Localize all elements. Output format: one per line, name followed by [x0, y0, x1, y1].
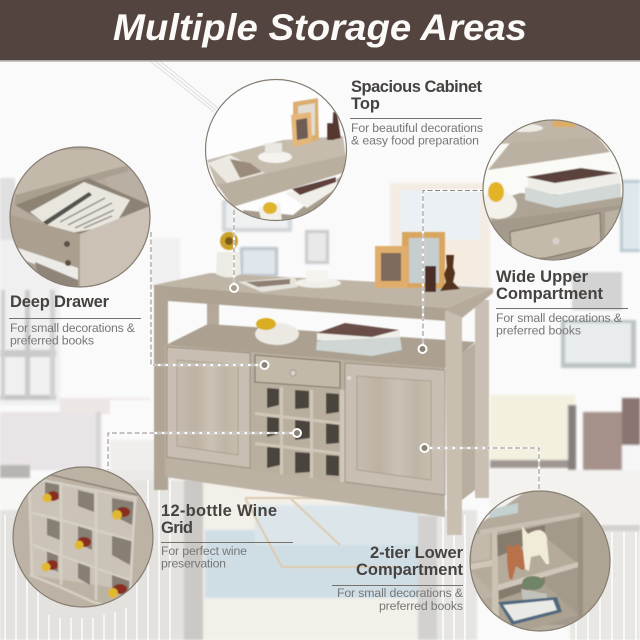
- text: wine grid: 12-bottle Wine: [161, 502, 277, 520]
- candle holders: [425, 255, 460, 292]
- title: Multiple Storage Areas: [113, 7, 527, 48]
- cabinet body backing: [165, 345, 445, 517]
- text: wide upper compartment: preferred books: [496, 324, 581, 338]
- connector: wine grid: [108, 429, 301, 470]
- text: wine grid: Grid: [161, 519, 193, 537]
- text: spacious cabinet top: For beautiful decorations: [351, 121, 483, 135]
- open book and plate: [238, 270, 341, 292]
- detail circle: wine grid: [13, 467, 153, 612]
- text: spacious cabinet top: & easy food preparation: [351, 134, 479, 148]
- text: wine grid: preservation: [161, 556, 226, 570]
- text: wide upper compartment: For small decorations &: [496, 311, 623, 325]
- detail circle: wide upper compartment: [479, 120, 623, 260]
- wine grid: [255, 385, 345, 482]
- vase with sunflower: [216, 232, 241, 278]
- coffee table outline: [245, 498, 410, 567]
- text: wide upper compartment: [496, 268, 628, 338]
- right door: [345, 363, 445, 495]
- text: spacious cabinet top: Top: [351, 95, 380, 113]
- text: wine grid: For perfect wine: [161, 544, 247, 558]
- back legs and side panel: [207, 300, 489, 500]
- text: lower compartment: For small decorations &: [337, 586, 464, 600]
- text: deep drawer: For small decorations &: [10, 321, 136, 335]
- text: wine grid: [161, 502, 293, 570]
- connector: deep drawer: [151, 232, 268, 369]
- connector: cabinet top: [230, 210, 238, 292]
- books on shelf: [316, 323, 402, 356]
- right front leg: [445, 310, 462, 535]
- middle shelf: [166, 324, 475, 371]
- text: deep drawer: preferred books: [10, 334, 94, 348]
- text: lower compartment: [332, 544, 464, 613]
- text: spacious cabinet top: [350, 78, 483, 148]
- text: wide upper compartment: Wide Upper: [496, 268, 589, 286]
- cabinet top: [154, 273, 493, 321]
- connector: wide upper compartment: [418, 190, 485, 353]
- detail circle: cabinet top: [206, 80, 346, 222]
- text: lower compartment: Compartment: [356, 561, 464, 579]
- connector: lower compartment: [420, 444, 539, 490]
- text: lower compartment: preferred books: [379, 599, 463, 613]
- photo frames: [375, 232, 445, 288]
- left front leg: [154, 288, 168, 490]
- left door: [167, 347, 250, 468]
- text: lower compartment: 2-tier Lower: [370, 544, 464, 562]
- text: wide upper compartment: Compartment: [496, 285, 604, 303]
- detail circle: deep drawer: [10, 147, 150, 290]
- text: deep drawer: Deep Drawer: [10, 293, 110, 311]
- bottom rail: [165, 458, 445, 517]
- drawer: [255, 355, 340, 388]
- text: spacious cabinet top: Spacious Cabinet: [351, 78, 482, 96]
- cabinet with items: [154, 232, 493, 535]
- white vase with yellow flowers: [255, 318, 299, 345]
- text: deep drawer: [9, 293, 141, 348]
- header banner: [0, 0, 640, 62]
- detail circle: lower compartment: [470, 491, 610, 632]
